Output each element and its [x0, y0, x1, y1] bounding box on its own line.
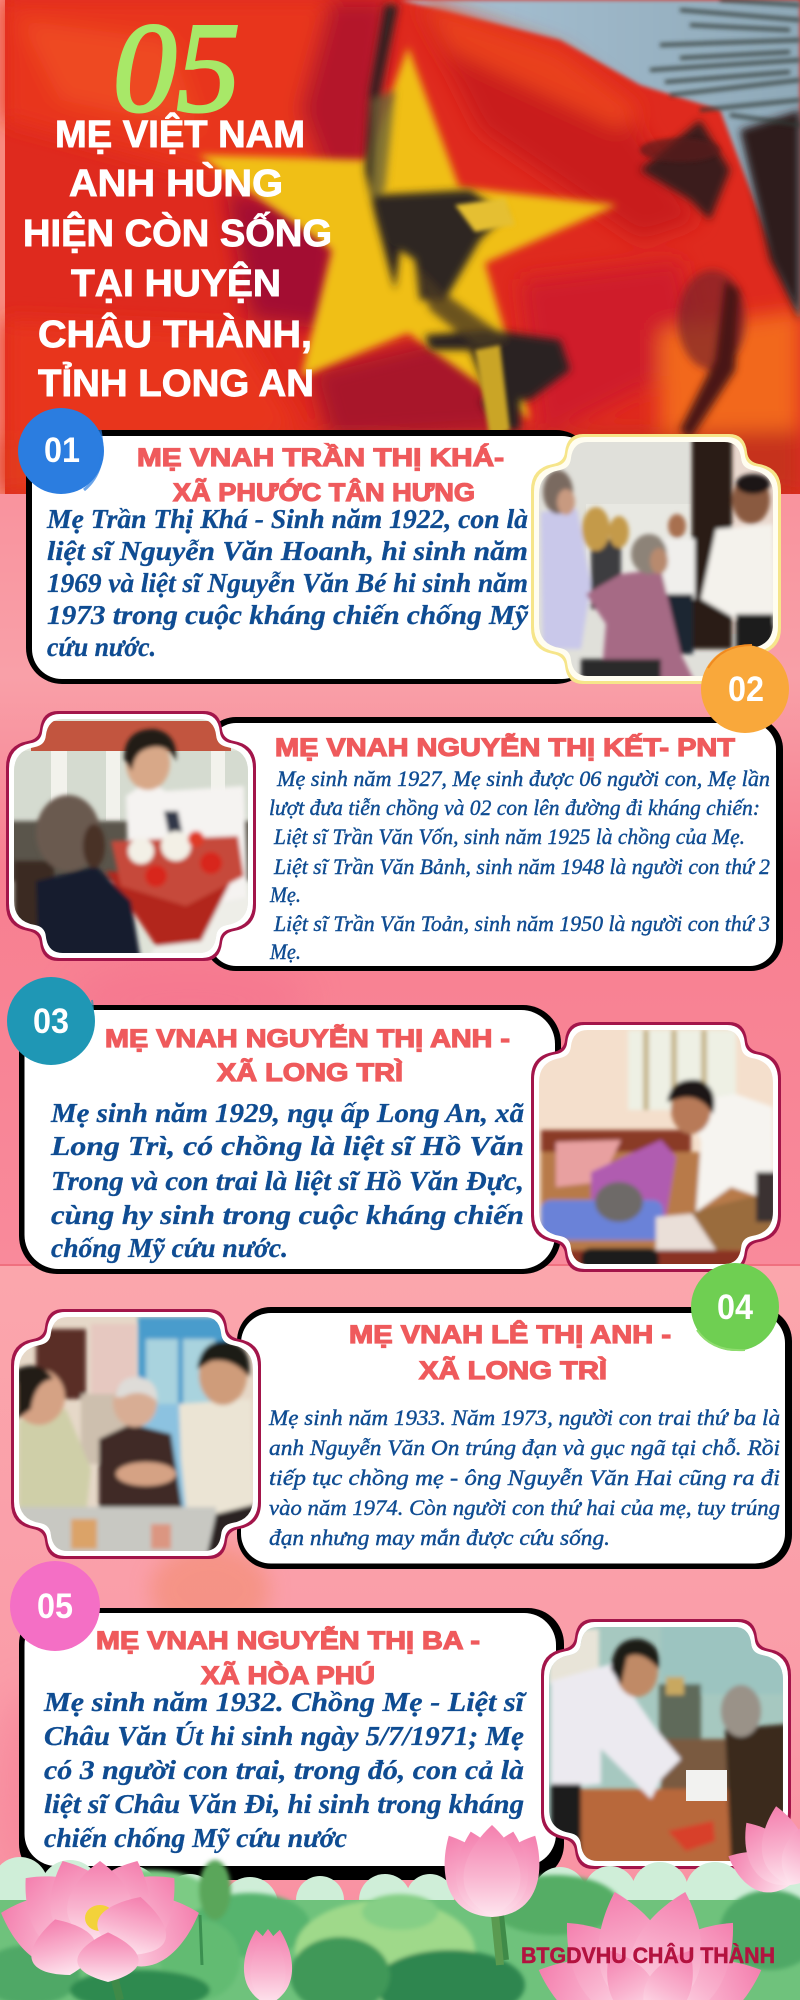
- flag photo banner: [0, 0, 800, 494]
- badge 01: 01: [44, 431, 80, 470]
- body text 01: 1973 trong cuộc kháng chiến chống Mỹ: [47, 600, 529, 630]
- big number 05: 05: [113, 0, 240, 139]
- panel 02: Nguyễn Thị Kết: [204, 717, 783, 971]
- body text 02: Mẹ sinh năm 1927, Mẹ sinh được 06 người con, Mẹ lần: [276, 766, 770, 791]
- heading 04: XÃ LONG TRÌ: [419, 1355, 607, 1385]
- title text lines: [23, 112, 332, 405]
- body text 05: [43, 1687, 527, 1853]
- body text 05: Châu Văn Út hi sinh ngày 5/7/1971; Mẹ: [44, 1721, 524, 1751]
- badge 03: 03: [33, 1002, 69, 1041]
- body text 02: [269, 766, 770, 964]
- heading 03: [105, 1023, 510, 1087]
- body text 01: cứu nước.: [47, 632, 156, 662]
- body text 05: Mẹ sinh năm 1932. Chồng Mẹ - Liệt sĩ: [43, 1687, 527, 1717]
- badge 05: 05: [37, 1587, 73, 1626]
- heading 05: XÃ HÒA PHÚ: [201, 1660, 375, 1690]
- green leaves: [0, 1857, 800, 2000]
- heading 05: [96, 1625, 480, 1690]
- body text 04: [268, 1405, 780, 1550]
- body text 04: vào năm 1974. Còn người con thứ hai của mẹ, tuy trúng: [269, 1495, 780, 1520]
- body text 05: liệt sĩ Châu Văn Đi, hi sinh trong kháng: [44, 1789, 524, 1819]
- body text 05: có 3 người con trai, trong đó, con cả là: [44, 1755, 524, 1785]
- body text 04: Mẹ sinh năm 1933. Năm 1973, người con trai thứ ba là: [268, 1405, 780, 1430]
- heading 04: [349, 1319, 671, 1385]
- body text 02: Liệt sĩ Trần Văn Toản, sinh năm 1950 là người con thứ 3: [273, 911, 770, 936]
- body text 01: [46, 504, 529, 662]
- badge 02: 02: [728, 670, 764, 709]
- body text 05: chiến chống Mỹ cứu nước: [44, 1823, 347, 1853]
- lotus: bottom right: [526, 1882, 774, 2000]
- photo 05: handing envelope: [541, 1619, 791, 1869]
- bottom lotus garden: [0, 1802, 800, 2000]
- lotus: right edge: [721, 1802, 800, 1902]
- lotus: bud top centre: [427, 1824, 557, 1965]
- body text 03: Trong và con trai là liệt sĩ Hồ Văn Đực,: [51, 1166, 524, 1196]
- heading 01: [137, 443, 504, 507]
- badge 04: 04: [717, 1288, 753, 1327]
- photo 01: visiting mother in wheelchair: [531, 434, 781, 684]
- credit text: BTGDVHU CHÂU THÀNH: [521, 1943, 775, 1968]
- body text 03: chống Mỹ cứu nước.: [51, 1233, 288, 1263]
- title text lines: HIỆN CÒN SỐNG: [23, 210, 332, 255]
- heading 01: MẸ VNAH TRẦN THỊ KHÁ-: [137, 443, 504, 472]
- dark statue silhouette: [365, 5, 800, 440]
- body text 02: lượt đưa tiễn chồng và 02 con lên đường đi kháng chiến:: [269, 795, 760, 820]
- photo 03: visiting bedridden mother: [531, 1022, 781, 1272]
- lotus: large left: [0, 1848, 210, 1984]
- title text lines: CHÂU THÀNH,: [38, 312, 312, 356]
- photo 02: presenting flowers: [6, 711, 256, 961]
- heading 03: XÃ LONG TRÌ: [217, 1057, 403, 1087]
- panel 05: Nguyễn Thị Ba: [19, 1608, 564, 1880]
- panel 04: Lê Thị Anh: [237, 1307, 792, 1569]
- body text 02: Mẹ.: [269, 882, 301, 907]
- badge 01: [18, 408, 104, 494]
- page background: [0, 480, 800, 2000]
- title block: [23, 0, 332, 405]
- body text 02: Liệt sĩ Trần Văn Vốn, sinh năm 1925 là chồng của Mẹ.: [273, 824, 745, 849]
- title text lines: TỈNH LONG AN: [38, 361, 314, 405]
- heading 05: MẸ VNAH NGUYỄN THỊ BA -: [96, 1625, 480, 1655]
- body text 02: Mẹ.: [269, 939, 301, 964]
- lotus: small bud: [238, 1927, 298, 2000]
- title text lines: TẠI HUYỆN: [71, 261, 281, 305]
- body text 01: Mẹ Trần Thị Khá - Sinh năm 1922, con là: [46, 504, 528, 534]
- title text lines: ANH HÙNG: [69, 161, 283, 205]
- badge 04: [691, 1263, 779, 1351]
- body text 02: Liệt sĩ Trần Văn Bảnh, sinh năm 1948 là người con thứ 2: [273, 854, 770, 879]
- badge 05: [10, 1561, 100, 1651]
- badge 03: [7, 977, 95, 1065]
- body text 03: cùng hy sinh trong cuộc kháng chiến: [51, 1200, 524, 1230]
- badge 02: [701, 645, 789, 733]
- body text 01: 1969 và liệt sĩ Nguyễn Văn Bé hi sinh năm: [47, 568, 528, 598]
- panel 01: Trần Thị Khá: [26, 430, 781, 684]
- panel 03: Nguyễn Thị Anh: [19, 1005, 561, 1274]
- body text 04: tiếp tục chồng mẹ - ông Nguyễn Văn Hai cũng ra đi: [269, 1465, 780, 1490]
- photo 04: holding hands at table: [11, 1309, 261, 1559]
- body text 03: Mẹ sinh năm 1929, ngụ ấp Long An, xã: [50, 1098, 525, 1128]
- heading 03: MẸ VNAH NGUYỄN THỊ ANH -: [105, 1023, 510, 1053]
- yellow star: [199, 47, 617, 420]
- body text 04: đạn nhưng may mắn được cứu sống.: [269, 1525, 610, 1550]
- body text 04: anh Nguyễn Văn On trúng đạn và gục ngã tại chỗ. Rồi: [269, 1435, 780, 1460]
- body text 03: Long Trì, có chồng là liệt sĩ Hồ Văn: [50, 1131, 524, 1161]
- heading 04: MẸ VNAH LÊ THỊ ANH -: [349, 1319, 671, 1349]
- title text lines: MẸ VIỆT NAM: [55, 112, 305, 156]
- body text 01: liệt sĩ Nguyễn Văn Hoanh, hi sinh năm: [47, 536, 528, 566]
- body text 03: [50, 1098, 525, 1263]
- heading 02: MẸ VNAH NGUYỄN THỊ KẾT- PNT: [275, 732, 735, 762]
- heading 01: XÃ PHƯỚC TÂN HƯNG: [173, 477, 475, 507]
- palm fronds: [650, 0, 800, 125]
